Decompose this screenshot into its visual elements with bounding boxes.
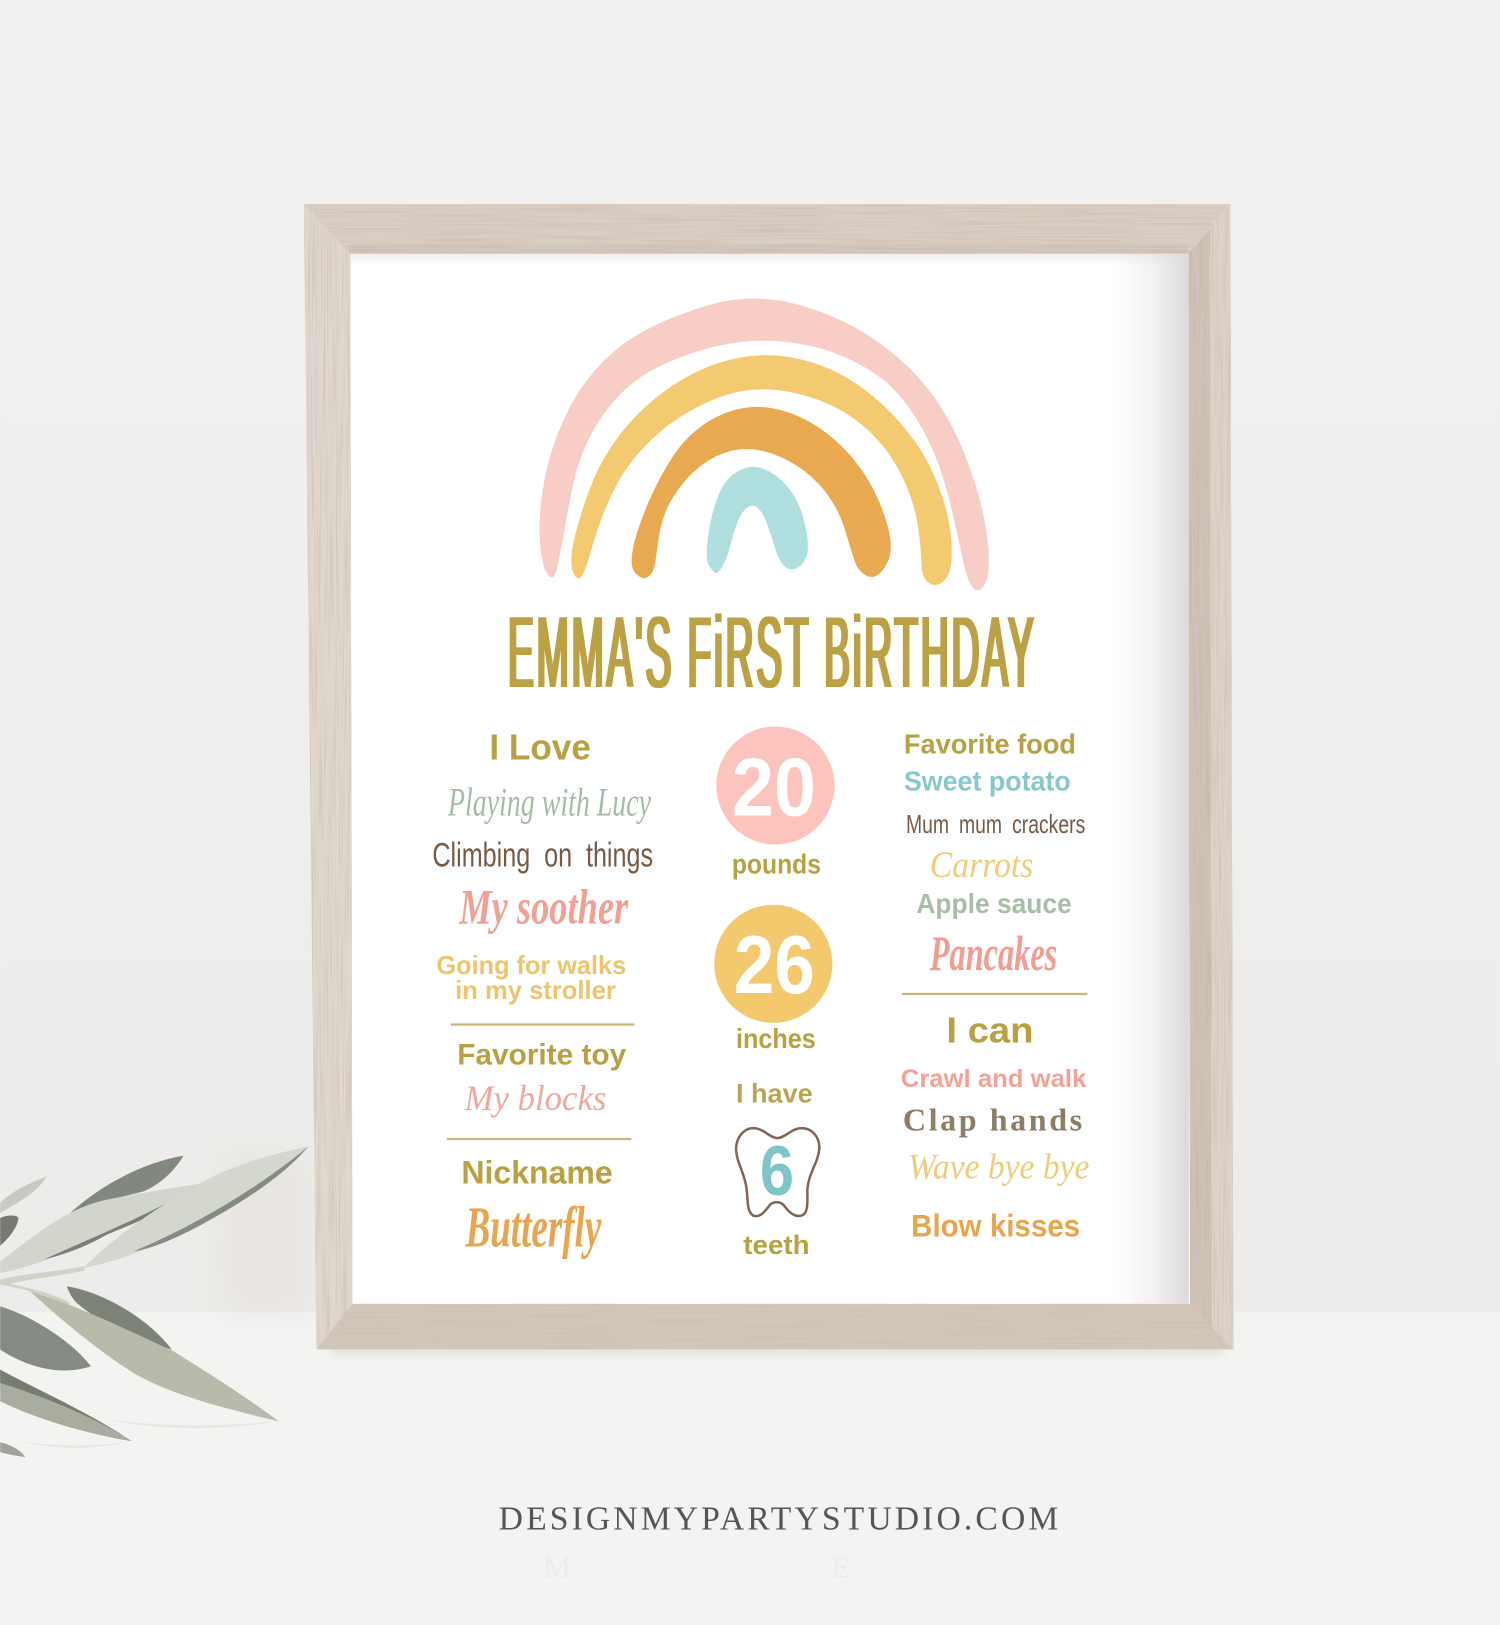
badge: 20 pounds: 20 bbox=[732, 741, 816, 834]
item: Apple sauce: Apple sauce bbox=[916, 888, 1072, 919]
item: Blow kisses: Blow kisses bbox=[911, 1208, 1080, 1243]
label: teeth: teeth bbox=[743, 1230, 810, 1260]
item: Crawl and walk: Crawl and walk bbox=[901, 1065, 1086, 1093]
item: Butterfly: Butterfly bbox=[465, 1195, 601, 1260]
title: EMMA'S FiRST BiRTHDAY bbox=[508, 596, 1034, 710]
rainbow blue arc bbox=[707, 467, 808, 573]
heading: Nickname: Nickname bbox=[461, 1155, 613, 1191]
icon: tooth with 6: 6 bbox=[760, 1131, 794, 1210]
website footer text: DESIGNMYPARTYSTUDIO.COM bbox=[499, 1501, 1058, 1538]
item: My soother: My soother bbox=[459, 879, 629, 934]
right column: favorite food and I can lists bbox=[901, 728, 1089, 1243]
item: Pancakes: Pancakes bbox=[929, 926, 1057, 981]
item: Sweet potato: Sweet potato bbox=[904, 766, 1071, 797]
heading: I Love: I Love bbox=[489, 727, 591, 768]
icon: tooth with 6 bbox=[736, 1128, 819, 1216]
item: Going for walks in my stroller: in my stroller bbox=[455, 977, 616, 1005]
rainbow orange arc bbox=[632, 407, 891, 578]
leaf shadows bbox=[20, 1420, 277, 1448]
wooden picture frame bbox=[304, 204, 1233, 1349]
item: Wave bye bye: Wave bye bye bbox=[908, 1146, 1089, 1186]
item: Playing with Lucy: Playing with Lucy bbox=[447, 780, 651, 825]
label: I have: I have bbox=[736, 1079, 813, 1109]
left column: I Love list bbox=[432, 727, 653, 1260]
item: Clap hands: Clap hands bbox=[903, 1102, 1082, 1138]
rainbow illustration bbox=[539, 299, 989, 590]
item: Going for walks in my stroller: Going for walks bbox=[437, 952, 626, 980]
badge: 26 inches: inches bbox=[736, 1023, 816, 1054]
item: Carrots: Carrots bbox=[930, 845, 1033, 886]
faint ghost lettering: E bbox=[831, 1549, 850, 1584]
heading: Favorite toy: Favorite toy bbox=[457, 1038, 626, 1071]
center column: measurements bbox=[714, 726, 834, 1260]
faint ghost lettering: M bbox=[543, 1549, 571, 1584]
framed white poster bbox=[350, 254, 1190, 1304]
faint ghost lettering bbox=[543, 1549, 850, 1584]
heading: Favorite food: Favorite food bbox=[904, 728, 1076, 759]
heading: I can: I can bbox=[946, 1010, 1033, 1051]
item: Going for walks in my stroller bbox=[437, 952, 626, 1005]
rainbow pink arc bbox=[539, 299, 989, 590]
olive branch bbox=[0, 1146, 308, 1457]
badge: 20 pounds: pounds bbox=[732, 849, 821, 880]
badge: 20 pounds bbox=[716, 726, 834, 880]
item: Climbing on things: Climbing on things bbox=[432, 836, 653, 874]
item: My blocks: My blocks bbox=[464, 1078, 606, 1118]
badge: 26 inches: 26 bbox=[734, 918, 815, 1011]
badge: 26 inches bbox=[714, 905, 832, 1054]
item: Mum mum crackers: Mum mum crackers bbox=[906, 811, 1085, 839]
rainbow yellow arc bbox=[571, 355, 952, 585]
